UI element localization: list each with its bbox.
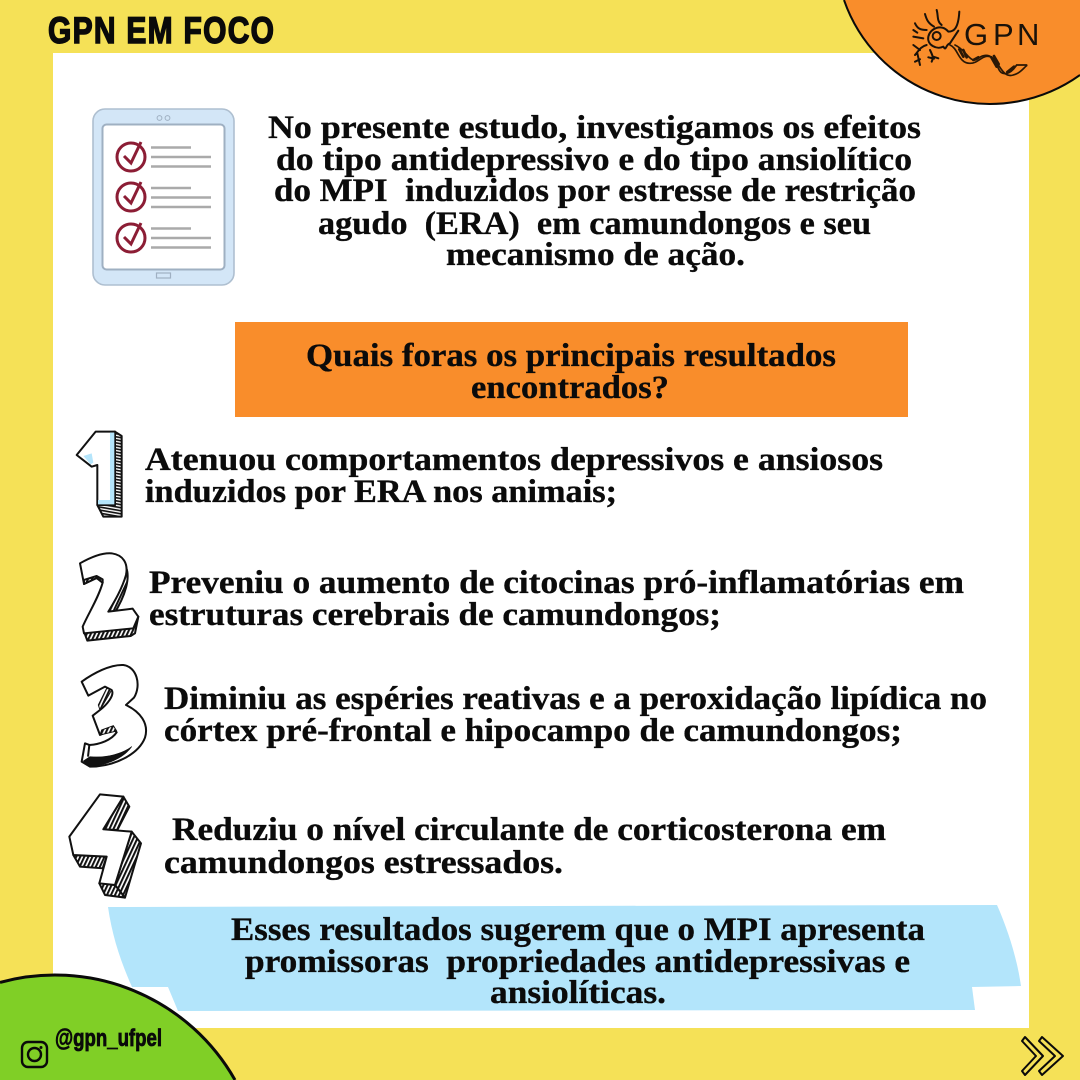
icon: tablet checklist	[93, 109, 234, 285]
heading: Quais foras os principais resultados	[306, 338, 836, 374]
item 4 text: camundongos estressados.	[164, 845, 563, 881]
item 2 text	[149, 565, 964, 633]
intro text	[268, 110, 921, 273]
item 4 text	[164, 812, 886, 881]
conclusion banner	[108, 905, 1021, 1011]
intro text: do MPI induzidos por estresse de restrição	[274, 173, 916, 209]
item 1 text: Atenuou comportamentos depressivos e ansiosos	[145, 442, 883, 478]
conclusion text: Esses resultados sugerem que o MPI apresenta	[231, 912, 925, 948]
heading: encontrados?	[471, 370, 669, 406]
numeral 2	[80, 553, 138, 641]
intro text: mecanismo de ação.	[446, 237, 745, 273]
orange heading box	[235, 322, 908, 417]
arrow: next chevrons	[1022, 1037, 1063, 1075]
numeral 3	[82, 665, 146, 767]
green corner badge	[0, 975, 235, 1080]
title: GPN EM FOCO	[48, 10, 274, 52]
heading	[306, 338, 836, 406]
intro text: do tipo antidepressivo e do tipo ansiolítico	[276, 142, 912, 178]
item 2 text: estruturas cerebrais de camundongos;	[149, 597, 721, 633]
icon: neuron	[913, 10, 959, 65]
icon: instagram	[22, 1042, 47, 1067]
numeral 1	[77, 432, 122, 517]
item 3 text	[164, 681, 987, 749]
conclusion text	[231, 912, 925, 1011]
logo badge	[844, 0, 1080, 104]
conclusion text: promissoras propriedades antidepressivas e	[245, 944, 910, 980]
social handle: @gpn_ufpel	[55, 1025, 162, 1052]
item 1 text	[145, 442, 883, 510]
item 4 text: Reduziu o nível circulante de corticosterona em	[172, 812, 886, 848]
icon: dna helix	[950, 45, 1027, 76]
conclusion text: ansiolíticas.	[490, 975, 666, 1011]
intro text: agudo (ERA) em camundongos e seu	[318, 206, 871, 242]
item 3 text: córtex pré-frontal e hipocampo de camundongos;	[164, 713, 902, 749]
intro text: No presente estudo, investigamos os efeitos	[268, 110, 921, 146]
numeral 4	[69, 794, 141, 898]
item 3 text: Diminiu as espéries reativas e a peroxidação lipídica no	[164, 681, 987, 717]
item 1 text: induzidos por ERA nos animais;	[145, 474, 617, 510]
item 2 text: Preveniu o aumento de citocinas pró-inflamatórias em	[149, 565, 964, 601]
logo text: GPN	[964, 17, 1039, 52]
